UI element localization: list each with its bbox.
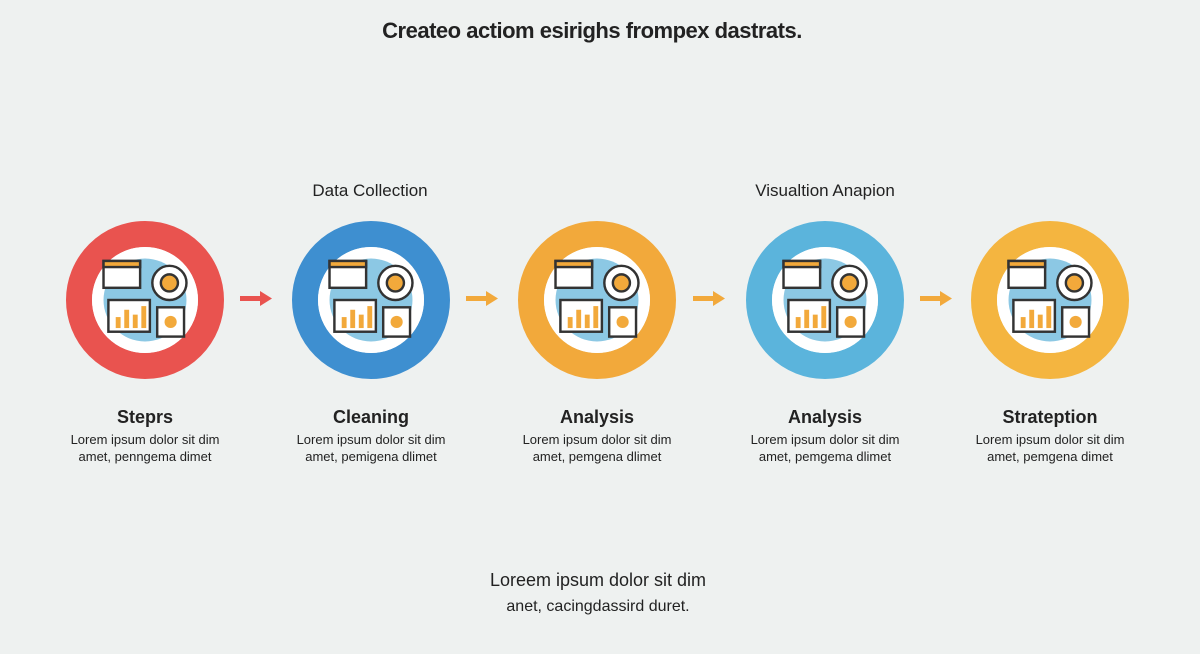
arrow 1	[240, 291, 272, 306]
label 3: Lorem ipsum dolor sit dim	[523, 432, 671, 447]
label 2: Cleaning	[333, 407, 409, 427]
label 1: amet, penngema dimet	[79, 449, 211, 464]
label 5: amet, pemgena dimet	[987, 449, 1113, 464]
label 4	[751, 407, 899, 464]
step 4 circle	[759, 234, 891, 366]
title: Createo actiom esirighs frompex dastrats.	[382, 18, 802, 43]
label 4: amet, pemgema dlimet	[759, 449, 891, 464]
footer text	[490, 570, 706, 615]
label 5	[976, 407, 1124, 464]
label 4: Lorem ipsum dolor sit dim	[751, 432, 899, 447]
label 3: amet, pemgena dlimet	[533, 449, 661, 464]
footer text: anet, cacingdassird duret.	[506, 598, 690, 615]
label 3	[523, 407, 671, 464]
step 3 circle	[531, 234, 663, 366]
label 1: Lorem ipsum dolor sit dim	[71, 432, 219, 447]
step 5 circle	[984, 234, 1116, 366]
label 4: Analysis	[788, 407, 862, 427]
label 5: Lorem ipsum dolor sit dim	[976, 432, 1124, 447]
step 2 circle	[305, 234, 437, 366]
label 2: Lorem ipsum dolor sit dim	[297, 432, 445, 447]
step labels	[71, 407, 1124, 464]
arrow 3	[693, 291, 725, 306]
heading: visualtion: Visualtion Anapion	[755, 181, 895, 200]
label 1: Steprs	[117, 407, 173, 427]
arrow 4	[920, 291, 952, 306]
heading: data collection: Data Collection	[312, 181, 428, 200]
footer text: Loreem ipsum dolor sit dim	[490, 570, 706, 590]
label 5: Strateption	[1002, 407, 1098, 427]
arrow 2	[466, 291, 498, 306]
label 2	[297, 407, 445, 464]
step 1 circle	[79, 234, 211, 366]
label 2: amet, pemigena dlimet	[305, 449, 437, 464]
label 3: Analysis	[560, 407, 634, 427]
label 1	[71, 407, 219, 464]
